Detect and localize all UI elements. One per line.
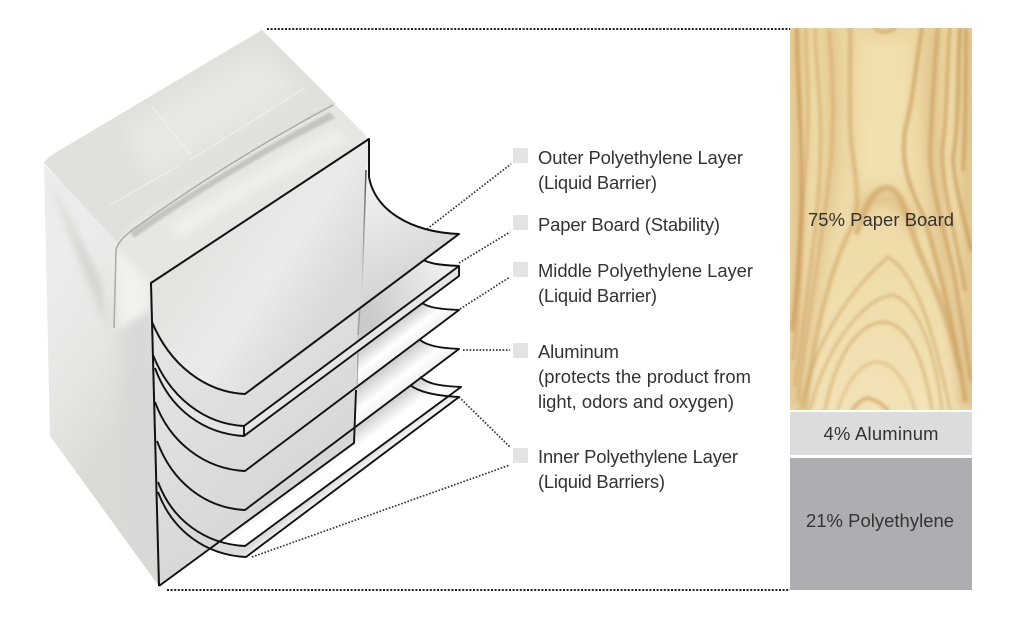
label: aluminum: Aluminum	[538, 341, 619, 362]
carton body	[44, 30, 369, 586]
sheet right of fold	[362, 160, 459, 306]
label: aluminum: light, odors and oxygen)	[538, 391, 734, 412]
polyethylene segment	[790, 458, 972, 590]
carton top flap	[44, 30, 336, 242]
layer 5	[158, 300, 461, 546]
label: middle polyethylene layer	[513, 260, 753, 306]
label: paper board: Paper Board (Stability)	[538, 214, 720, 235]
label: outer polyethylene layer	[513, 147, 743, 193]
top flap shading	[120, 50, 300, 180]
carton left side	[44, 165, 159, 586]
label: middle polyethylene layer: (Liquid Barrier)	[538, 285, 657, 306]
layer outlines	[153, 260, 461, 586]
carton silhouette base	[44, 30, 369, 283]
layer 3 middle polyethylene	[155, 240, 459, 471]
aluminum segment: 4% Aluminum	[824, 423, 938, 444]
label: inner polyethylene layer	[513, 446, 738, 492]
wood grain	[792, 28, 971, 410]
wood label: 75% Paper Board	[808, 209, 954, 230]
carton shoulder	[117, 106, 369, 283]
label: outer polyethylene layer: Outer Polyethylene Layer	[538, 147, 743, 168]
layer strips	[153, 200, 461, 557]
label: inner polyethylene layer: Inner Polyethylene Layer	[538, 446, 738, 467]
outer layer outline	[151, 139, 459, 586]
polyethylene segment: 21% Polyethylene	[806, 510, 954, 531]
fading fold line	[362, 170, 366, 292]
dotted bracket bottom	[167, 589, 790, 591]
fading vertical edge lines	[357, 308, 360, 385]
aluminum segment	[790, 412, 972, 455]
outer layer sheet	[151, 139, 459, 394]
leader lines	[252, 164, 511, 557]
back panel of cut-away	[151, 150, 359, 586]
label: outer polyethylene layer: (Liquid Barrier)	[538, 172, 657, 193]
label: middle polyethylene layer: Middle Polyethylene Layer	[538, 260, 753, 281]
carton illustration	[44, 30, 461, 586]
seam	[114, 105, 333, 328]
layer 4 aluminum	[157, 260, 459, 510]
dotted bracket top	[267, 28, 790, 30]
layer 2 paper board	[153, 200, 459, 426]
composition bar	[790, 28, 972, 590]
label: inner polyethylene layer: (Liquid Barriers)	[538, 471, 665, 492]
wood panel: 75% paper board	[790, 28, 972, 410]
label: aluminum	[513, 341, 751, 412]
label: aluminum: (protects the product from	[538, 366, 751, 387]
paper board thickness	[153, 266, 459, 436]
wood broad tones	[790, 28, 972, 410]
layer 6 inner polyethylene	[158, 300, 459, 557]
